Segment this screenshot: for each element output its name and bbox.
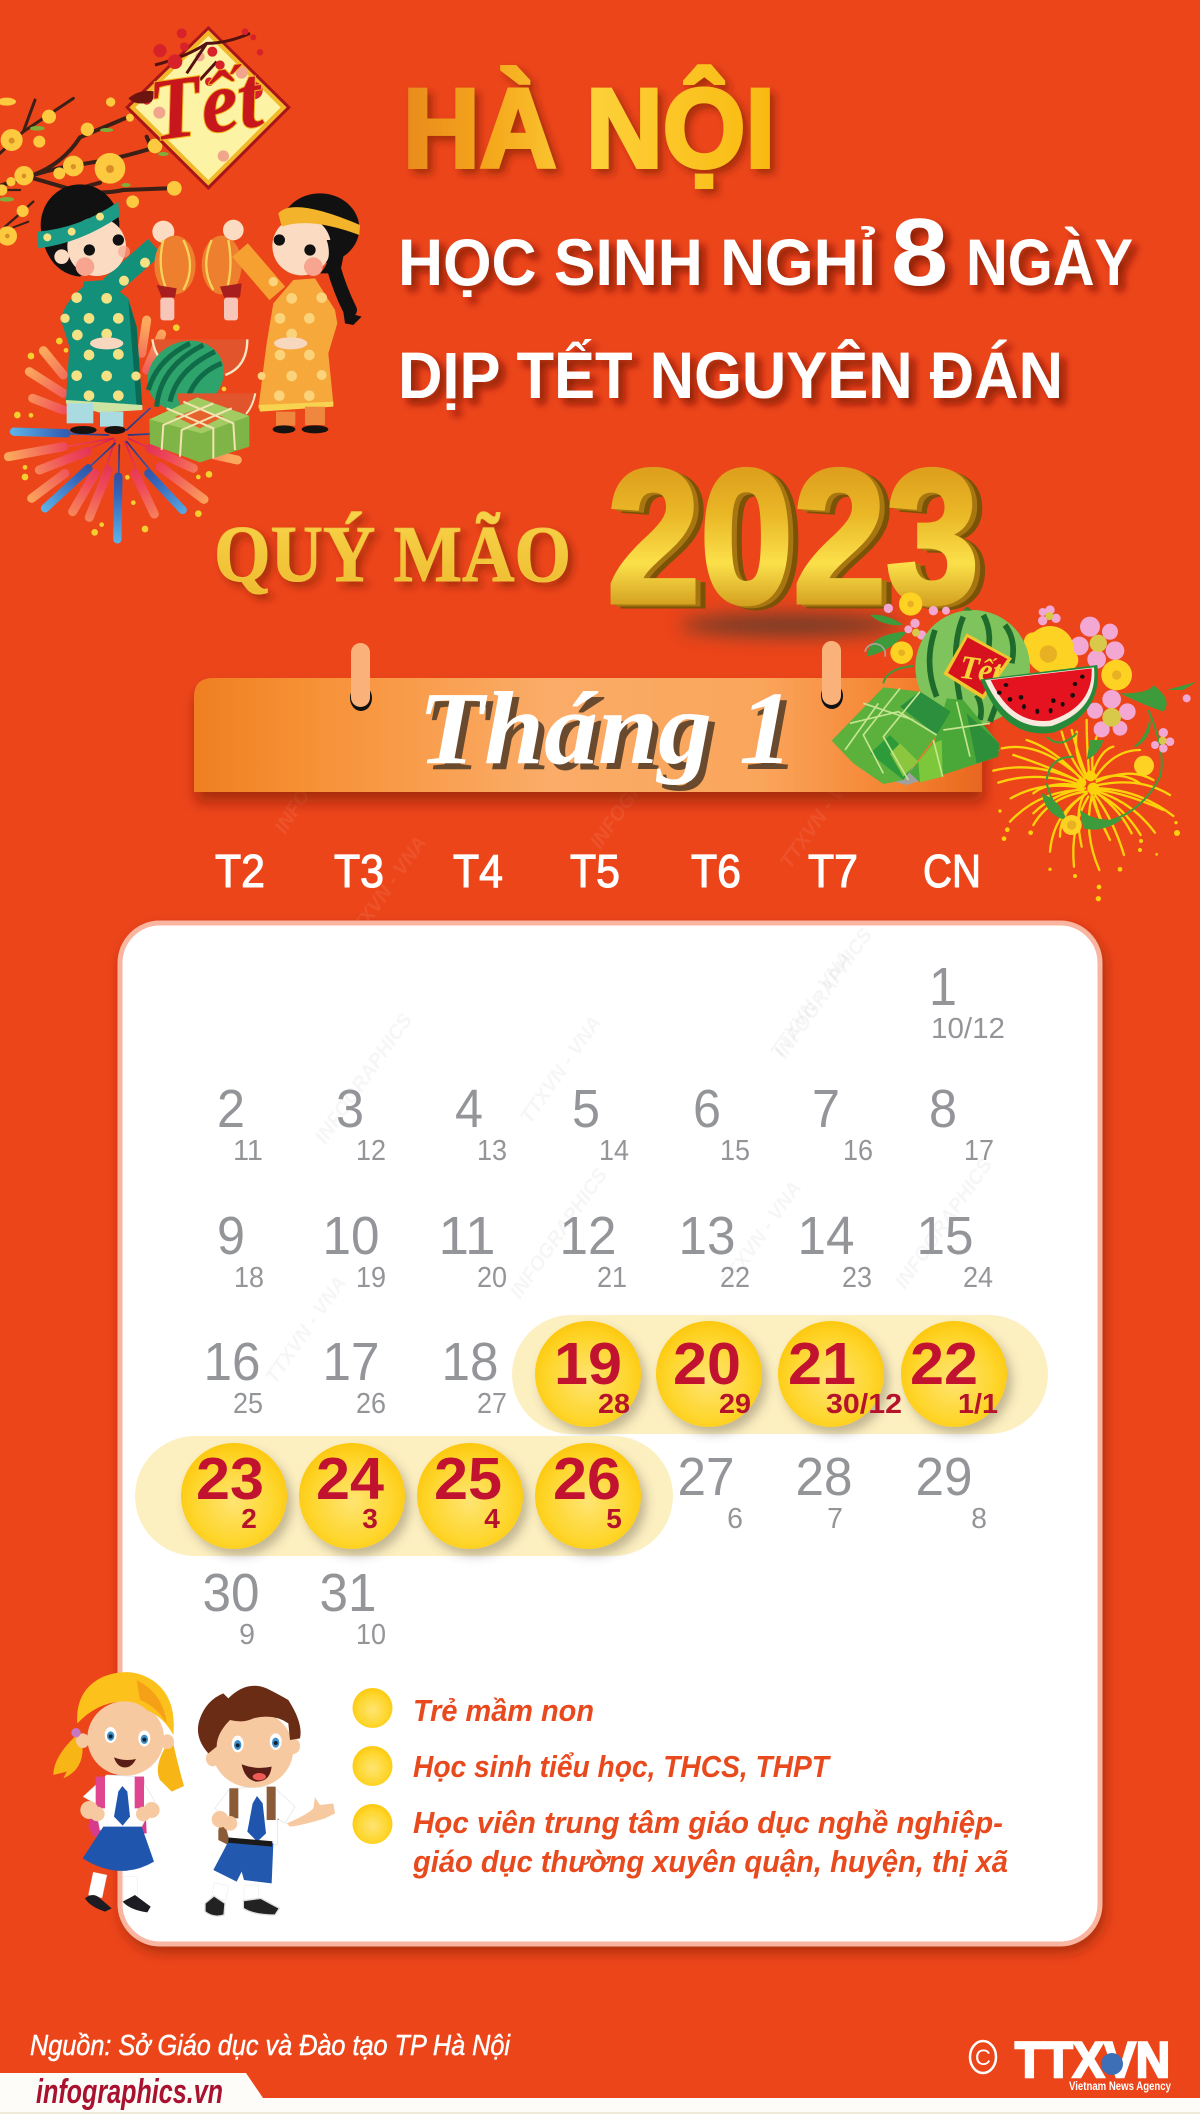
- illustration: apricot branch and Tết sign: [0, 26, 291, 246]
- weekday header: T7: [808, 845, 858, 897]
- holiday highlight: 19 to 22: 28: [598, 1388, 630, 1419]
- calendar row 6: 30 and 31: 31: [320, 1563, 376, 1623]
- watermark: orange area: TTXVN - VNA: [341, 832, 431, 948]
- holiday highlight: 23 to 26: 24: [316, 1446, 384, 1512]
- holiday highlight: 19 to 22: 21: [788, 1331, 856, 1397]
- watermark: card area: INFOGRAPHICS: [506, 1164, 612, 1303]
- watermark: card area: TTXVN - VNA: [261, 1272, 351, 1388]
- calendar row 3: 9 to 15: 9: [217, 1206, 245, 1266]
- headline: học sinh nghỉ 8 ngày: NGÀY: [966, 225, 1133, 299]
- illustration: flowers, melon, bánh chưng and yellow firework: [832, 592, 1197, 901]
- source line: Nguồn: Sở Giáo dục và Đào tạo TP Hà Nội: [30, 2030, 511, 2062]
- calendar row 2: 2 to 8: 2: [217, 1079, 245, 1139]
- footer tab: infographics.vn: [0, 2073, 1200, 2114]
- calendar row 1: 1: [929, 957, 1005, 1045]
- calendar row 3: 9 to 15: 10: [322, 1206, 380, 1266]
- legend item: Trẻ mầm non: [352, 1688, 594, 1728]
- icon: bánh chưng: [149, 397, 249, 462]
- calendar row 5: 27 to 29: 29: [916, 1447, 972, 1507]
- weekday header: [215, 845, 981, 897]
- watermark: orange area: [271, 695, 866, 948]
- footer tab: infographics.vn: infographics.vn: [36, 2073, 223, 2111]
- heading: Quý Mão: QUÝ MÃO: [214, 511, 571, 599]
- holiday highlight: 23 to 26: [135, 1436, 673, 1556]
- icon: watermelon with slices: [135, 328, 256, 424]
- calendar row 2: 2 to 8: 12: [356, 1135, 386, 1167]
- calendar row 3: 9 to 15: 22: [720, 1262, 750, 1294]
- watermark: orange area: INFOGRAPHICS: [586, 714, 692, 853]
- calendar row 3: 9 to 15: 23: [842, 1262, 872, 1294]
- calendar row 4: 16 to 18: 25: [233, 1388, 263, 1420]
- year 2023 gold: 2023: [607, 431, 979, 643]
- panel: calendar card: [120, 923, 1100, 1944]
- headline: học sinh nghỉ 8 ngày: [398, 199, 1133, 306]
- holiday highlight: 23 to 26: 5: [606, 1503, 622, 1534]
- calendar row 1: 1: 10/12: [931, 1013, 1005, 1045]
- watermark: card area: [261, 924, 997, 1388]
- legend: [352, 1688, 1008, 1879]
- calendar row 2: 2 to 8: 13: [477, 1135, 507, 1167]
- calendar row 3: 9 to 15: 15: [916, 1206, 974, 1266]
- calendar row 3: 9 to 15: 11: [438, 1206, 496, 1266]
- calendar row 5: 27 to 29: 6: [727, 1503, 743, 1535]
- figure: schoolgirl: [53, 1672, 184, 1912]
- illustration: children with lanterns, melon and bánh chưng over fireworks: [8, 184, 362, 539]
- calendar row 2: 2 to 8: 16: [843, 1135, 873, 1167]
- legend item: Học viên: giáo dục thường xuyên quận, huyện, thị xã: [412, 1844, 1008, 1879]
- calendar row 3: 9 to 15: 20: [477, 1262, 507, 1294]
- weekday header: CN: [923, 845, 981, 897]
- calendar row 4: 16 to 18: 16: [204, 1332, 260, 1392]
- calendar row 5: 27 to 29: 8: [971, 1503, 987, 1535]
- headline: dịp Tết Nguyên Đán: DỊP TẾT NGUYÊN ĐÁN: [398, 338, 1063, 412]
- calendar row 3: 9 to 15: 21: [597, 1262, 627, 1294]
- calendar row 6: 30 and 31: [202, 1563, 386, 1651]
- holiday highlight: 23 to 26: 25: [434, 1446, 502, 1512]
- calendar row 4: 16 to 18: 26: [356, 1388, 386, 1420]
- calendar row 3: 9 to 15: 12: [560, 1206, 616, 1266]
- calendar rings: [350, 641, 843, 711]
- calendar row 6: 30 and 31: 30: [202, 1563, 260, 1623]
- legend item: Học sinh: Học sinh tiểu học, THCS, THPT: [413, 1749, 832, 1784]
- calendar row 3: 9 to 15: 24: [963, 1262, 993, 1294]
- logo: TTXVN: TTXVN: [1015, 2032, 1170, 2088]
- legend item: Học viên: [352, 1804, 1008, 1879]
- holiday highlight: 19 to 22: [512, 1315, 1048, 1434]
- calendar row 2: 2 to 8: 6: [693, 1079, 721, 1139]
- watermark: card area: TTXVN - VNA: [716, 1177, 806, 1293]
- icon: Tết diamond sign: Tết: [143, 47, 270, 160]
- legend item: Trẻ mầm non: Trẻ mầm non: [413, 1693, 594, 1728]
- figure: boy in green áo dài: [37, 184, 174, 434]
- calendar row 4: 16 to 18: 18: [442, 1332, 498, 1392]
- calendar row 3: 9 to 15: 14: [798, 1206, 854, 1266]
- calendar row 2: 2 to 8: 8: [929, 1079, 957, 1139]
- weekday header: T4: [453, 845, 503, 897]
- weekday header: T6: [691, 845, 741, 897]
- icon: red Tết card: Tết: [957, 649, 1005, 691]
- holiday highlight: 23 to 26: 23: [196, 1446, 264, 1512]
- icon: Tết diamond sign: [125, 26, 291, 190]
- holiday highlight: 23 to 26: 26: [553, 1446, 621, 1512]
- watermark: card area: TTXVN - VNA: [766, 947, 856, 1063]
- watermark: card area: INFOGRAPHICS: [771, 924, 877, 1063]
- calendar row 5: 27 to 29: 7: [827, 1503, 843, 1535]
- watermark: card area: INFOGRAPHICS: [891, 1154, 997, 1293]
- calendar row 3: 9 to 15: [217, 1206, 993, 1294]
- figure: schoolboy: [198, 1686, 335, 1916]
- holiday highlight: 19 to 22: 22: [910, 1331, 978, 1397]
- calendar row 2: 2 to 8: [217, 1079, 994, 1167]
- calendar row 2: 2 to 8: 17: [964, 1135, 994, 1167]
- calendar row 6: 30 and 31: 10: [356, 1619, 386, 1651]
- calendar row 3: 9 to 15: 13: [678, 1206, 736, 1266]
- watermark: orange area: TTXVN - VNA: [776, 757, 866, 873]
- icon: round watermelon: [915, 607, 1030, 725]
- calendar row 2: 2 to 8: 5: [572, 1079, 600, 1139]
- calendar row 2: 2 to 8: 15: [720, 1135, 750, 1167]
- calendar row 5: 27 to 29: 28: [796, 1447, 852, 1507]
- icon: watermelon slice: [981, 665, 1098, 733]
- calendar row 2: 2 to 8: 11: [233, 1135, 263, 1167]
- logo: TTXVN: Vietnam News Agency: [1069, 2079, 1171, 2093]
- figure: girl in yellow áo dài: [223, 193, 362, 433]
- month label: Tháng 1: [424, 677, 799, 792]
- calendar row 2: 2 to 8: 3: [336, 1079, 364, 1139]
- month label: Tháng 1: [418, 671, 793, 786]
- calendar row 1: 1: 1: [929, 957, 957, 1017]
- holiday highlight: 19 to 22: 1/1: [958, 1388, 998, 1419]
- calendar row 5: 27 to 29: 27: [678, 1447, 734, 1507]
- illustration: schoolchildren: [53, 1672, 335, 1916]
- legend item: Học viên: Học viên trung tâm giáo dục nghề nghiệp-: [413, 1805, 1003, 1840]
- holiday highlight: 19 to 22: 19: [554, 1331, 622, 1397]
- calendar row 4: 16 to 18: 27: [477, 1388, 507, 1420]
- calendar row 6: 30 and 31: 9: [239, 1619, 255, 1651]
- holiday highlight: 23 to 26: 3: [362, 1503, 378, 1534]
- calendar row 5: 27 to 29: [678, 1447, 987, 1535]
- calendar row 2: 2 to 8: 14: [599, 1135, 629, 1167]
- logo: TTXVN: C: [975, 2045, 991, 2070]
- logo: TTXVN: [970, 2032, 1171, 2093]
- flowers and leaves: [865, 592, 1197, 835]
- yellow firework: [993, 720, 1173, 870]
- watermark: card area: TTXVN - VNA: [516, 1012, 606, 1128]
- calendar row 2: 2 to 8: 4: [455, 1079, 483, 1139]
- weekday header: T2: [215, 845, 265, 897]
- year 2023 gold: 2023: [612, 433, 984, 645]
- calendar row 4: 16 to 18: 17: [322, 1332, 380, 1392]
- calendar row 4: 16 to 18: [204, 1332, 507, 1420]
- holiday highlight: 19 to 22: 20: [673, 1331, 741, 1397]
- calendar row 3: 9 to 15: 18: [234, 1262, 264, 1294]
- fireworks burst left: [8, 320, 237, 539]
- calendar row 3: 9 to 15: 19: [356, 1262, 386, 1294]
- icon: red Tết card: [943, 633, 1012, 699]
- headline: học sinh nghỉ 8 ngày: HỌC SINH NGHỈ: [398, 225, 876, 299]
- holiday highlight: 19 to 22: 30/12: [826, 1388, 902, 1419]
- icon: bánh chưng pair: [832, 687, 1000, 785]
- holiday highlight: 19 to 22: 29: [719, 1388, 751, 1419]
- icon: lanterns: [154, 236, 242, 320]
- watermark: orange area: INFOGRAPHICS: [271, 695, 371, 838]
- headline: học sinh nghỉ 8 ngày: 8: [891, 199, 948, 306]
- watermark: card area: INFOGRAPHICS: [311, 1009, 417, 1148]
- banner: Tháng 1: [194, 671, 982, 792]
- holiday highlight: 23 to 26: 4: [484, 1503, 500, 1534]
- holiday highlight: 23 to 26: 2: [241, 1503, 257, 1534]
- weekday header: T5: [570, 845, 620, 897]
- calendar row 2: 2 to 8: 7: [812, 1079, 840, 1139]
- title: Hà Nội: HÀ NỘI: [403, 66, 775, 191]
- year 2023 gold: 2023: [617, 435, 989, 647]
- weekday header: T3: [334, 845, 384, 897]
